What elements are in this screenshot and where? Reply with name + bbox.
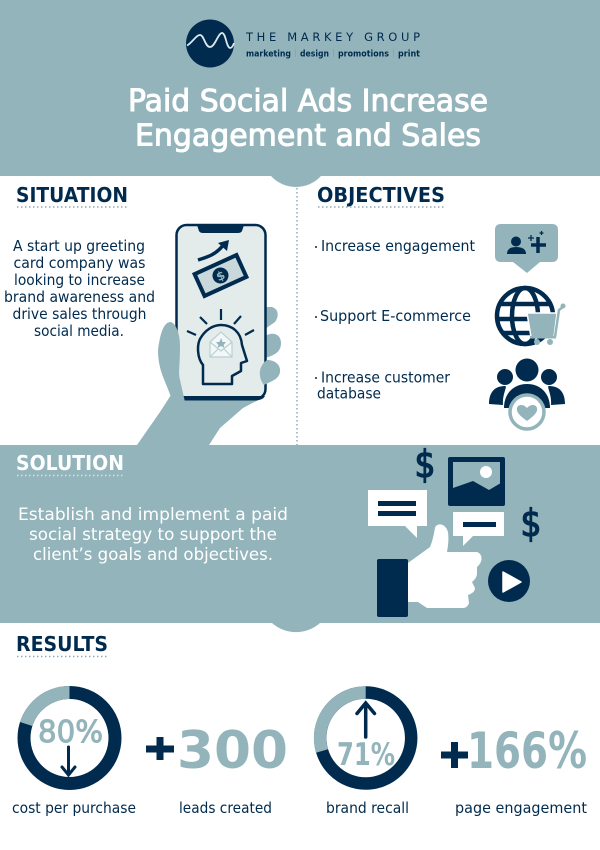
result: brand recall: 71% (337, 737, 395, 773)
result: page engagement: page engagement (455, 799, 587, 817)
situation text (4, 237, 155, 340)
objectives list: Increase customer (321, 368, 451, 386)
result: leads created (146, 721, 288, 817)
logo (186, 20, 421, 68)
header band (0, 0, 600, 187)
phone in hand illustration (137, 225, 281, 445)
solution text (18, 505, 288, 565)
solution illustration: $ (520, 502, 542, 545)
solution band (0, 445, 600, 632)
phone body (176, 225, 266, 399)
lower finger (260, 360, 280, 385)
situation text: A start up greeting (13, 237, 145, 255)
envelope (210, 332, 232, 357)
icon: engagement speech bubble (495, 224, 558, 273)
result: brand recall: brand recall (326, 799, 409, 817)
logo: marketing (246, 50, 291, 60)
situation text: card company was (14, 254, 146, 272)
solution text: social strategy to support the (29, 525, 277, 545)
result: page engagement (441, 722, 587, 817)
icon: customer group with heart (489, 358, 565, 429)
objectives list: database (317, 384, 381, 402)
icon: globe with shopping cart (497, 288, 566, 345)
title (128, 84, 488, 154)
icon: play button (488, 560, 530, 602)
result: cost per purchase: cost per purchase (12, 799, 136, 817)
logo: print (398, 50, 421, 60)
situation text: looking to increase (14, 271, 145, 289)
icon: thumbs up (408, 524, 482, 608)
objectives list: Support E-commerce (320, 307, 471, 325)
heading: objectives: OBJECTIVES (317, 183, 445, 207)
situation text: social media. (34, 322, 124, 340)
solution text: client’s goals and objectives. (33, 545, 273, 565)
logo: THE MARKEY GROUP (245, 30, 420, 44)
icon: speech bubble large (368, 490, 427, 538)
title: Paid Social Ads Increase (128, 84, 488, 119)
result: cost per purchase: 80% (38, 715, 103, 750)
icon: dollar signs: $ (414, 443, 436, 486)
result: leads created: leads created (179, 799, 272, 817)
growth arrow (198, 244, 224, 260)
result: cost per purchase (12, 692, 136, 817)
column divider (296, 188, 298, 445)
hand back and fingers (137, 395, 262, 445)
heading: results: RESULTS (16, 632, 108, 656)
solution illustration (368, 443, 542, 617)
objectives list (315, 237, 475, 402)
objectives list: Increase engagement (321, 237, 475, 255)
solution text: Establish and implement a paid (18, 505, 288, 525)
situation text: brand awareness and (4, 288, 155, 306)
head with idea rays (198, 325, 247, 384)
result: leads created: 300 (177, 721, 288, 781)
thumb (158, 322, 185, 402)
heading: solution: SOLUTION (16, 451, 124, 475)
title: Engagement and Sales (135, 118, 481, 154)
result: brand recall (320, 692, 411, 817)
banknote: $ (214, 268, 227, 284)
banknote (195, 255, 246, 296)
situation text: drive sales through (12, 305, 146, 323)
icon: speech bubble small (453, 512, 504, 546)
icon: image card (448, 457, 505, 506)
logo: design (300, 50, 329, 60)
heading: situation: SITUATION (16, 183, 128, 207)
logo: promotions (338, 50, 389, 60)
